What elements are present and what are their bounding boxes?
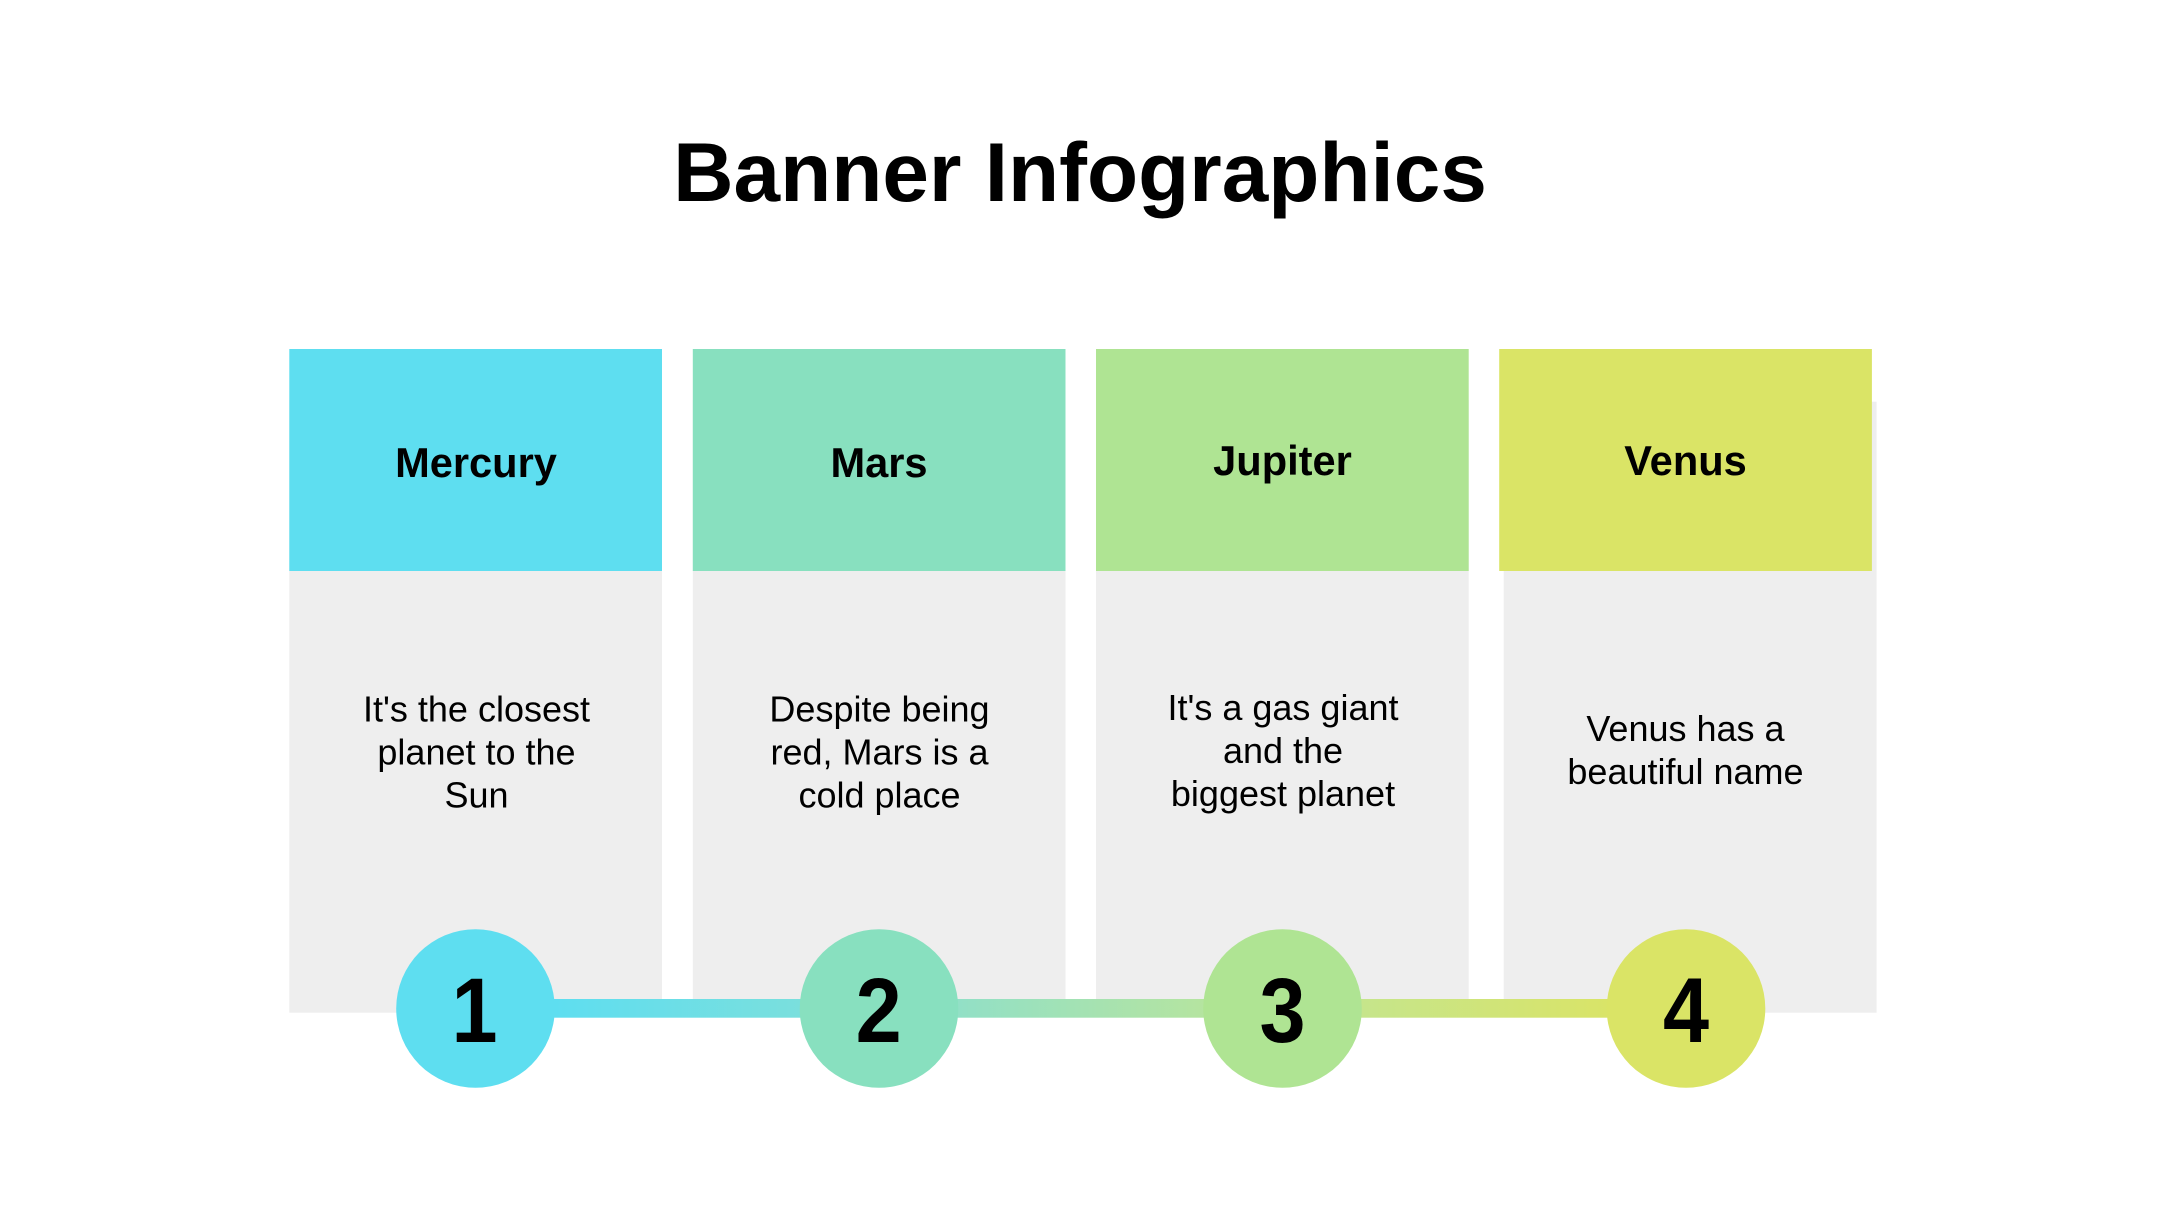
panel: Mars (693, 349, 1066, 1013)
step 1 (396, 929, 555, 1088)
title: Banner Infographics (673, 125, 1487, 219)
text block: Mars: red, Mars is a (770, 732, 990, 773)
circle 4 (1607, 929, 1765, 1088)
number 4: 4 (1663, 959, 1709, 1062)
step 2 (800, 929, 958, 1088)
text block: Mercury: planet to the (377, 732, 576, 773)
header band: Mercury (289, 349, 662, 571)
connector line (475, 999, 1686, 1018)
text block: Jupiter: and the (1223, 730, 1343, 771)
header band: Venus (1499, 349, 1872, 571)
circle 2 (800, 929, 958, 1088)
text block: Jupiter: It's a gas giant (1167, 687, 1399, 728)
panel body: Mercury (289, 400, 662, 1013)
number 2: 2 (856, 959, 902, 1062)
panel body: Jupiter (1096, 400, 1469, 1013)
panel body: Mars (693, 400, 1066, 1013)
header band: Jupiter (1096, 349, 1469, 571)
number 1: 1 (451, 959, 498, 1062)
header band: Mars (693, 349, 1066, 571)
number 3: 3 (1259, 959, 1306, 1062)
heading: Mars: Mars (830, 439, 928, 486)
text block: Mars: Despite being (769, 689, 990, 730)
text block: Venus: beautiful name (1567, 751, 1804, 792)
step 4 (1607, 929, 1765, 1088)
text block: Mars: cold place (798, 774, 961, 816)
text block: Venus: Venus has a (1586, 708, 1786, 749)
panel: Jupiter (1096, 349, 1469, 1013)
text block: Mercury: It's the closest (363, 689, 590, 730)
panel: Mercury (289, 349, 662, 1013)
circle 3 (1203, 929, 1362, 1088)
panel body: Venus (1504, 402, 1877, 1013)
heading: Mercury: Mercury (395, 439, 557, 486)
text block: Mercury: Sun (444, 774, 509, 816)
panel: Venus (1499, 349, 1877, 1013)
heading: Venus: Venus (1624, 437, 1747, 484)
heading: Jupiter: Jupiter (1213, 437, 1352, 484)
circle 1 (396, 929, 555, 1088)
text block: Jupiter: biggest planet (1171, 773, 1395, 814)
step 3 (1203, 929, 1362, 1088)
